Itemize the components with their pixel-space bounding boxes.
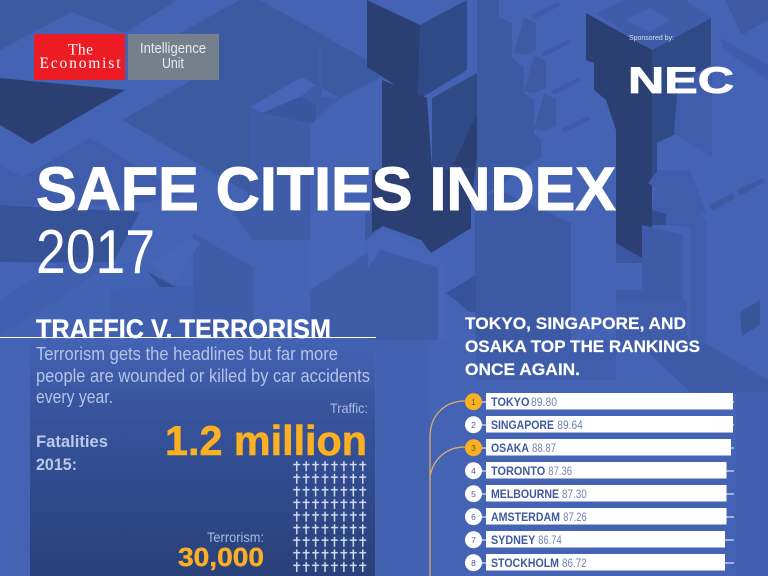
lower area tints [617, 300, 687, 350]
label: traffic: Traffic: [330, 400, 368, 416]
label: fatalities 2015 [36, 433, 108, 474]
rank 7: 7 [471, 535, 476, 545]
rank 7: SYDNEY [491, 535, 536, 547]
rank 8 [465, 554, 725, 571]
rank 5: 5 [471, 489, 476, 499]
intro text: every year. [36, 387, 113, 407]
rank 5 [465, 485, 726, 502]
logo: The Economist [34, 34, 125, 80]
rank 1: 1 [471, 397, 476, 407]
rank 8: 86.72 [562, 558, 587, 570]
rank 7 [465, 531, 725, 548]
rank 4: 4 [471, 466, 476, 476]
rank 4: TORONTO [491, 466, 545, 478]
rank 2: SINGAPORE [491, 420, 554, 432]
rank 5: MELBOURNE [491, 489, 559, 501]
logo: Intelligence Unit: Intelligence [140, 41, 206, 57]
label: fatalities 2015: 2015: [36, 456, 77, 474]
left blocks [0, 0, 177, 50]
rank 1 [465, 393, 733, 410]
rank 3: 88.87 [532, 443, 556, 455]
logo: Intelligence Unit [128, 34, 219, 80]
icons: traffic fatalities crosses [292, 460, 367, 573]
intro text: people are wounded or killed by car accidents [36, 366, 370, 386]
rank 3: OSAKA [491, 443, 529, 455]
heading: rankings: TOKYO, SINGAPORE, AND [465, 314, 686, 333]
antenna building [233, 50, 340, 213]
rank 6 [465, 508, 726, 525]
rank 1: TOKYO [491, 397, 530, 409]
sponsor label: Sponsored by: [629, 33, 674, 42]
heading: traffic v. terrorism: TRAFFIC V. TERRORISM [36, 314, 331, 344]
rank 7: 86.74 [538, 535, 562, 547]
logo: NEC: NEC [628, 60, 734, 101]
rank 8: STOCKHOLM [491, 558, 559, 570]
label: terrorism: Terrorism: [207, 529, 264, 545]
logo: The Economist: Economist [40, 55, 121, 72]
heading: rankings: ONCE AGAIN. [465, 360, 580, 379]
connector lines [430, 401, 465, 576]
label: fatalities 2015: Fatalities [36, 433, 108, 451]
rank 8: 8 [471, 558, 476, 568]
rank 6: 87.26 [563, 512, 587, 524]
rank 1: 89.80 [531, 397, 557, 409]
heading: rankings: OSAKA TOP THE RANKINGS [465, 337, 700, 356]
stepped column [471, 0, 541, 205]
rank 2 [465, 416, 733, 433]
rank 3: 3 [471, 443, 476, 453]
intro text: Terrorism gets the headlines but far more [36, 344, 338, 364]
panel: fatalities backdrop [30, 335, 375, 576]
rank 4 [465, 462, 726, 479]
rank 6: AMSTERDAM [491, 512, 560, 524]
rank 2: 2 [471, 420, 476, 430]
tick marks [480, 402, 734, 564]
rank 4: 87.36 [548, 466, 572, 478]
rank 3 [465, 439, 731, 456]
intro text [36, 344, 370, 407]
rank 5: 87.30 [562, 489, 587, 501]
logo: Intelligence Unit: Unit [162, 56, 184, 72]
right lower blocks [648, 170, 706, 213]
rank 2: 89.64 [557, 420, 583, 432]
right dark tower [616, 243, 652, 263]
value: 30,000: 30,000 [178, 542, 264, 572]
title: SAFE CITIES INDEX [36, 155, 616, 223]
heading rule [0, 337, 376, 338]
value: 1.2 million: 1.2 million [165, 417, 367, 464]
title year: 2017 [36, 218, 155, 287]
central dark tower [367, 0, 420, 100]
rank 6: 6 [471, 512, 476, 522]
heading: rankings [465, 314, 700, 379]
ranking list [465, 393, 734, 571]
logo: The Economist: The [68, 42, 93, 58]
central mid block [475, 190, 571, 340]
